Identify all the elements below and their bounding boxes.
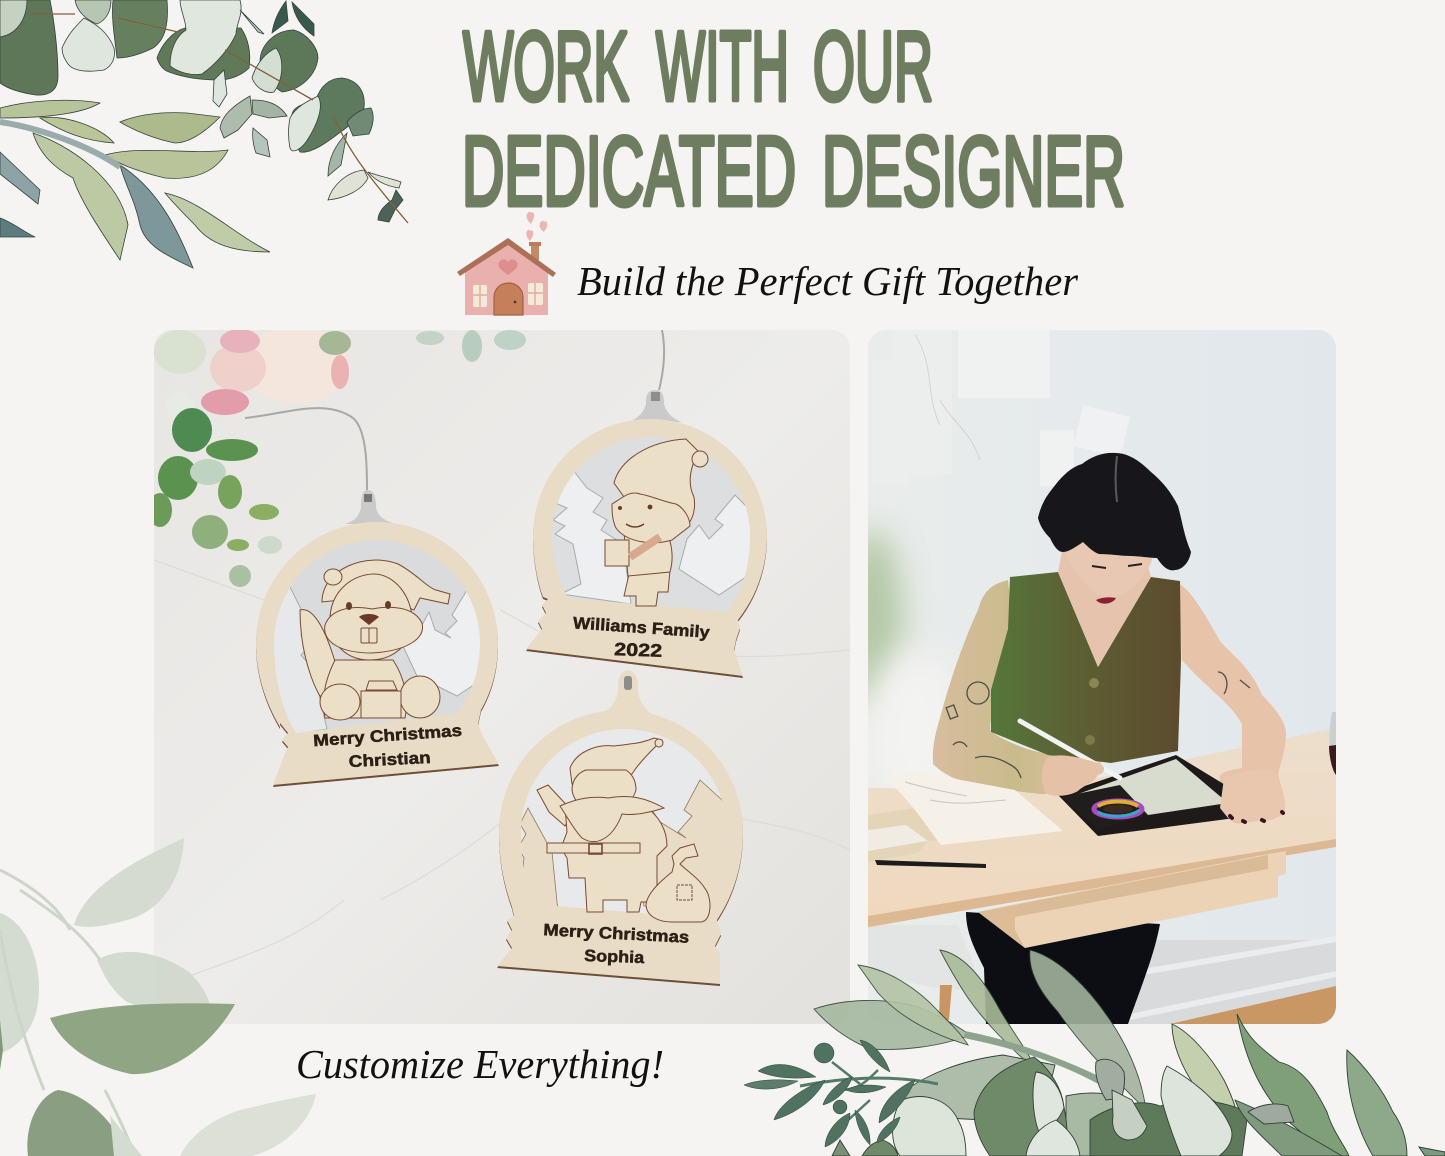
label: Merry Christmas Christian: Merry Christmas	[313, 722, 463, 750]
blurred chair back	[868, 642, 948, 776]
vest	[991, 572, 1181, 763]
blurred foreground plant	[842, 530, 902, 710]
trousers	[966, 912, 1160, 1024]
sprig with buds	[744, 1040, 938, 1147]
title: DESIGNER	[822, 116, 1125, 226]
label: Merry Christmas Christian	[314, 727, 462, 768]
title: DEDICATED	[462, 116, 796, 226]
title: OUR	[813, 11, 933, 121]
pencil on desk	[875, 860, 986, 868]
wall sketches	[914, 330, 1130, 486]
panel: ornaments photo	[148, 327, 850, 1024]
title	[462, 11, 1125, 226]
icon: pink house with hearts	[457, 212, 556, 315]
foliage: bottom-left corner	[0, 838, 316, 1156]
ornament: beaver	[256, 490, 499, 787]
ornament: elf	[526, 390, 767, 678]
chair	[868, 925, 983, 990]
label: Williams Family 2022: Williams Family	[572, 614, 711, 642]
title: WORK	[463, 11, 629, 121]
subtitle: Build the Perfect Gift Together	[577, 258, 1079, 304]
neck and face	[1058, 532, 1155, 667]
foliage: top-left corner	[0, 0, 408, 268]
ornament: santa	[497, 670, 743, 986]
caption: Customize Everything!	[296, 1041, 664, 1087]
beaver figure	[300, 560, 450, 720]
label: Merry Christmas Christian: Christian	[348, 749, 431, 771]
label: Merry Christmas Sophia: Merry Christmas	[543, 921, 690, 947]
left arm	[933, 580, 1101, 794]
foliage: bottom-right corner	[744, 950, 1445, 1156]
panel: designer photo	[842, 330, 1336, 1024]
label: Williams Family 2022: 2022	[614, 639, 663, 661]
wine glass	[1329, 712, 1336, 776]
elf figure	[605, 439, 708, 606]
label: Williams Family 2022	[573, 616, 710, 657]
hair	[1038, 453, 1191, 570]
floor and baseboard	[1120, 939, 1336, 1024]
tattoos	[946, 672, 1250, 778]
drawer	[978, 851, 1286, 948]
label: Merry Christmas Sophia: Sophia	[584, 947, 645, 967]
tablet	[1058, 755, 1245, 836]
desk	[868, 728, 1336, 928]
open notebook	[868, 772, 1063, 862]
santa figure	[537, 738, 710, 922]
icon: colour wheel	[1094, 801, 1142, 817]
title: WITH	[656, 11, 789, 121]
right arm	[1178, 583, 1286, 823]
hanging silver strings	[245, 330, 664, 490]
flowers and greenery in the photo	[148, 327, 526, 587]
hands and stylus	[1020, 721, 1285, 822]
label: Merry Christmas Sophia	[543, 921, 690, 967]
